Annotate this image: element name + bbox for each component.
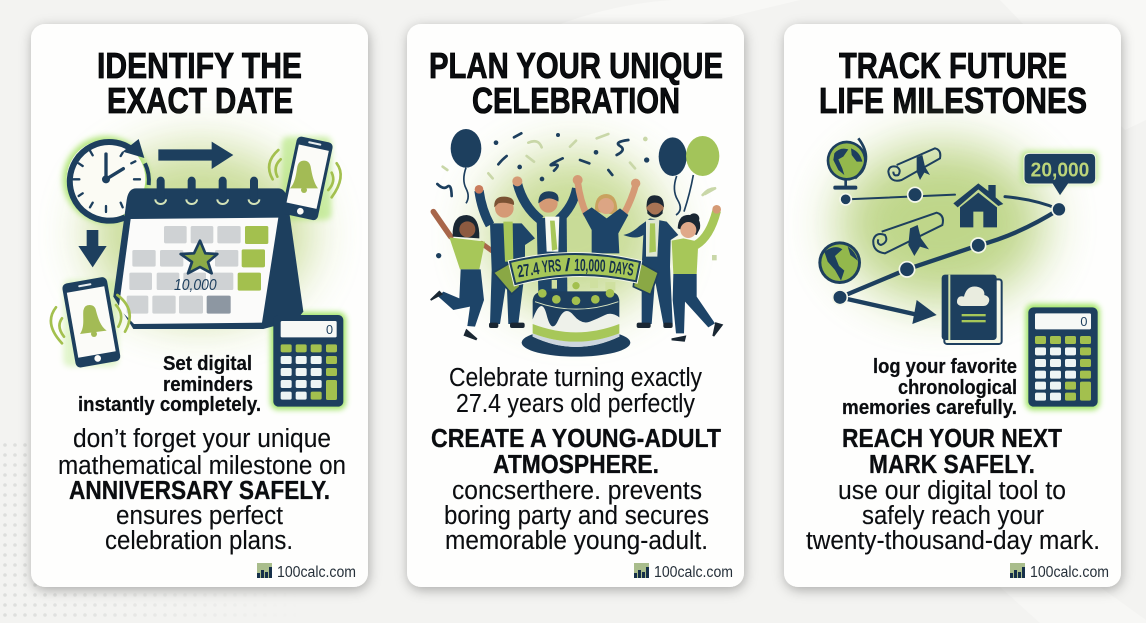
illustration: calendar, clock, phones xyxy=(51,136,346,410)
text block: reach your next mark: use our digital tool to xyxy=(838,477,1066,505)
icon: journal xyxy=(942,275,1002,344)
text block: celebrate xyxy=(431,364,721,555)
heading: plan your unique celebration: PLAN YOUR UNIQUE xyxy=(429,45,723,86)
icon: desk globe xyxy=(827,138,867,190)
icon: calculator: 0 xyxy=(326,323,333,337)
person: man with raised arm xyxy=(475,185,535,328)
banner: 27.4 yrs / 10,000 days: / xyxy=(565,255,571,275)
icon: phone with bell, top right xyxy=(269,136,341,221)
heading: track future life milestones: LIFE MILESTONES xyxy=(819,80,1087,121)
text block: reach your next mark: safely reach your xyxy=(862,502,1044,530)
confetti xyxy=(436,133,717,260)
text block: don't forget xyxy=(58,425,346,555)
illustration: milestone timeline xyxy=(818,138,1100,410)
panel: plan your unique celebration xyxy=(407,24,744,587)
icon: calendar xyxy=(113,177,303,329)
banner: 27.4 yrs / 10,000 days xyxy=(493,254,658,295)
caption: log your favorite: memories carefully. xyxy=(842,396,1017,419)
person: central man xyxy=(512,176,577,293)
footer logo: 100calc.com: 100calc.com xyxy=(654,564,733,581)
caption: set digital reminders: Set digital xyxy=(163,352,252,375)
icon: birthday cake xyxy=(522,279,630,357)
arrow head xyxy=(912,300,937,324)
person: left woman xyxy=(431,212,492,339)
icon: globe xyxy=(818,241,861,284)
text block: reach your next mark: MARK SAFELY. xyxy=(869,451,1035,479)
heading: identify the exact date: EXACT DATE xyxy=(107,80,293,121)
text block: reach your next mark: REACH YOUR NEXT xyxy=(842,425,1062,453)
caption: set digital reminders: reminders xyxy=(163,373,253,396)
icon: house xyxy=(953,183,1003,227)
heading: track future life milestones: TRACK FUTURE xyxy=(839,45,1067,86)
panel: identify the exact date xyxy=(31,24,368,587)
banner: 27.4 yrs / 10,000 days: 10,000 xyxy=(574,255,606,276)
timeline path xyxy=(840,195,1059,315)
timeline nodes xyxy=(833,187,1066,305)
heading: identify the exact date xyxy=(97,45,302,121)
arrow: right xyxy=(158,142,233,169)
text block: reach your next mark: twenty-thousand-day mark. xyxy=(806,527,1100,555)
icon: speech bubble 20,000: 20,000 xyxy=(1031,160,1089,182)
panel: track future life milestones xyxy=(784,24,1121,587)
text block: celebrate: CREATE A YOUNG-ADULT xyxy=(431,425,721,453)
text block: don't forget: celebration plans. xyxy=(105,527,293,555)
icon: balloons xyxy=(451,129,719,215)
text block: reach your next mark xyxy=(806,425,1100,555)
banner: 27.4 yrs / 10,000 days: 27.4 xyxy=(516,258,541,281)
background xyxy=(3,443,186,617)
footer logo: 100calc.com: 100calc.com xyxy=(1030,564,1109,581)
icon: calculator xyxy=(1028,307,1098,407)
text block: celebrate: ATMOSPHERE. xyxy=(493,451,659,479)
illustration: party group with cake xyxy=(431,129,722,357)
heading: plan your unique celebration xyxy=(429,45,723,121)
text block: celebrate: Celebrate turning exactly xyxy=(449,364,702,392)
heading: identify the exact date: IDENTIFY THE xyxy=(97,45,302,86)
text block: don't forget: ensures perfect xyxy=(116,502,283,530)
heading: plan your unique celebration: CELEBRATION xyxy=(472,80,680,121)
caption: log your favorite xyxy=(842,355,1017,419)
arrow: down xyxy=(78,230,107,267)
icon: phone with bell, left xyxy=(51,276,130,368)
caption: log your favorite: chronological xyxy=(898,376,1017,399)
footer logo: 100calc.com: 100calc.com xyxy=(277,564,356,581)
banner: 27.4 yrs / 10,000 days: DAYS xyxy=(608,256,635,280)
text block: celebrate: boring party and secures xyxy=(444,502,709,530)
text block: don't forget: don’t forget your unique xyxy=(73,425,331,453)
person: right woman xyxy=(672,205,722,341)
icon: clock xyxy=(67,139,149,221)
icon: diploma top xyxy=(888,148,940,181)
icon: calculator xyxy=(273,315,343,407)
caption: log your favorite: log your favorite xyxy=(873,355,1017,378)
heading: track future life milestones xyxy=(819,45,1087,121)
caption: set digital reminders: instantly completely. xyxy=(78,393,261,416)
text block: don't forget: mathematical milestone on xyxy=(58,452,346,480)
text block: celebrate: memorable young-adult. xyxy=(445,527,708,555)
person: bearded man xyxy=(623,195,678,328)
banner: 27.4 yrs / 10,000 days: YRS xyxy=(541,255,562,277)
icon: diploma lower xyxy=(873,213,943,256)
icon: calculator: 0 xyxy=(1080,315,1087,329)
icon: speech bubble 20,000 xyxy=(1024,153,1096,196)
text block: don't forget: ANNIVERSARY SAFELY. xyxy=(69,477,330,505)
text block: celebrate: concserthere. prevents xyxy=(452,477,702,505)
person: blonde woman xyxy=(573,175,640,253)
icon: calendar: 10,000 xyxy=(174,277,217,294)
caption: set digital reminders xyxy=(78,352,261,416)
text block: celebrate: 27.4 years old perfectly xyxy=(456,390,695,418)
